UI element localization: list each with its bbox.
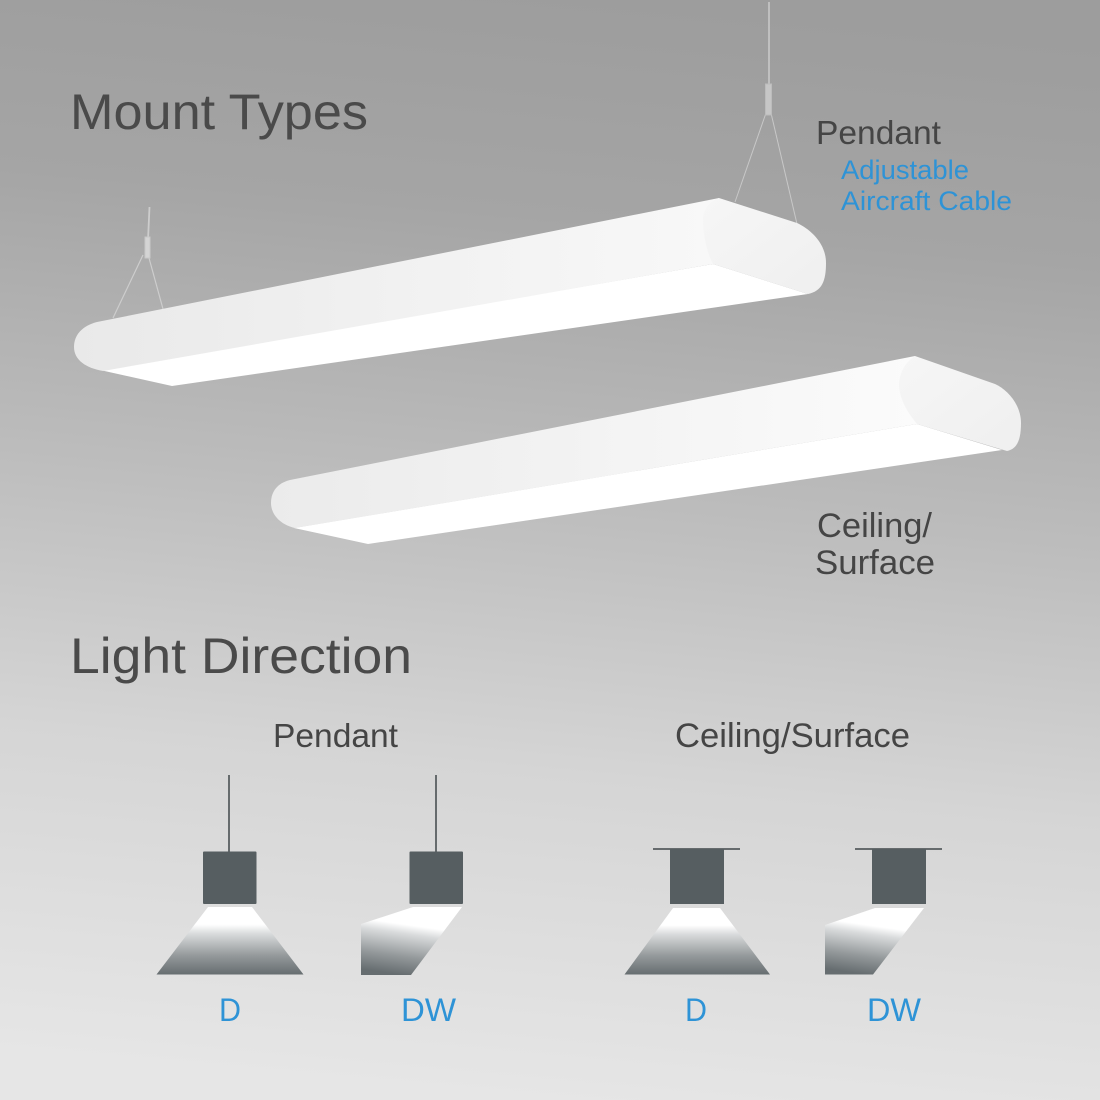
heading: Light Direction: Light Direction	[70, 628, 412, 684]
light beam	[156, 907, 304, 974]
label: Ceiling/Surface mount: Ceiling/	[817, 507, 933, 545]
subheading: Ceiling/Surface: Ceiling/Surface	[675, 717, 910, 755]
diagram: ceiling direct wall-wash	[825, 848, 942, 1028]
subheading: Pendant: Pendant	[273, 717, 398, 754]
surface diffuser	[294, 424, 1002, 544]
surface housing	[271, 356, 917, 528]
label D: D	[685, 992, 707, 1028]
surface end cap	[899, 356, 1021, 451]
light beam	[361, 907, 462, 975]
pendant end cap	[703, 198, 826, 294]
label D: D	[219, 992, 241, 1028]
pendant housing	[74, 198, 719, 371]
housing	[410, 852, 463, 904]
label DW: DW	[867, 992, 922, 1028]
label: Pendant mount	[816, 114, 1012, 216]
heading: Mount Types: Mount Types	[70, 84, 368, 140]
mounting plate	[653, 848, 740, 850]
label note: Aircraft Cable	[841, 186, 1012, 216]
light beam	[624, 908, 770, 974]
diagram: pendant direct	[156, 775, 304, 1028]
label: Ceiling/Surface mount: Surface	[815, 544, 935, 582]
label DW: DW	[401, 992, 457, 1028]
cord	[228, 775, 230, 852]
cord	[435, 775, 437, 852]
label title: Pendant	[816, 114, 941, 151]
pendant fixture with cables	[74, 2, 826, 386]
right suspension cable	[735, 2, 797, 224]
left suspension cable	[113, 207, 163, 318]
housing	[203, 852, 256, 904]
housing	[670, 849, 724, 904]
pendant diffuser	[100, 264, 808, 386]
mounting plate	[855, 848, 942, 850]
diagram: pendant direct wall-wash	[361, 775, 463, 1028]
light beam	[825, 908, 924, 974]
ceiling surface fixture	[271, 356, 1021, 544]
label note: Adjustable	[841, 155, 969, 185]
diagram: ceiling direct	[624, 848, 770, 1028]
housing	[872, 849, 926, 904]
